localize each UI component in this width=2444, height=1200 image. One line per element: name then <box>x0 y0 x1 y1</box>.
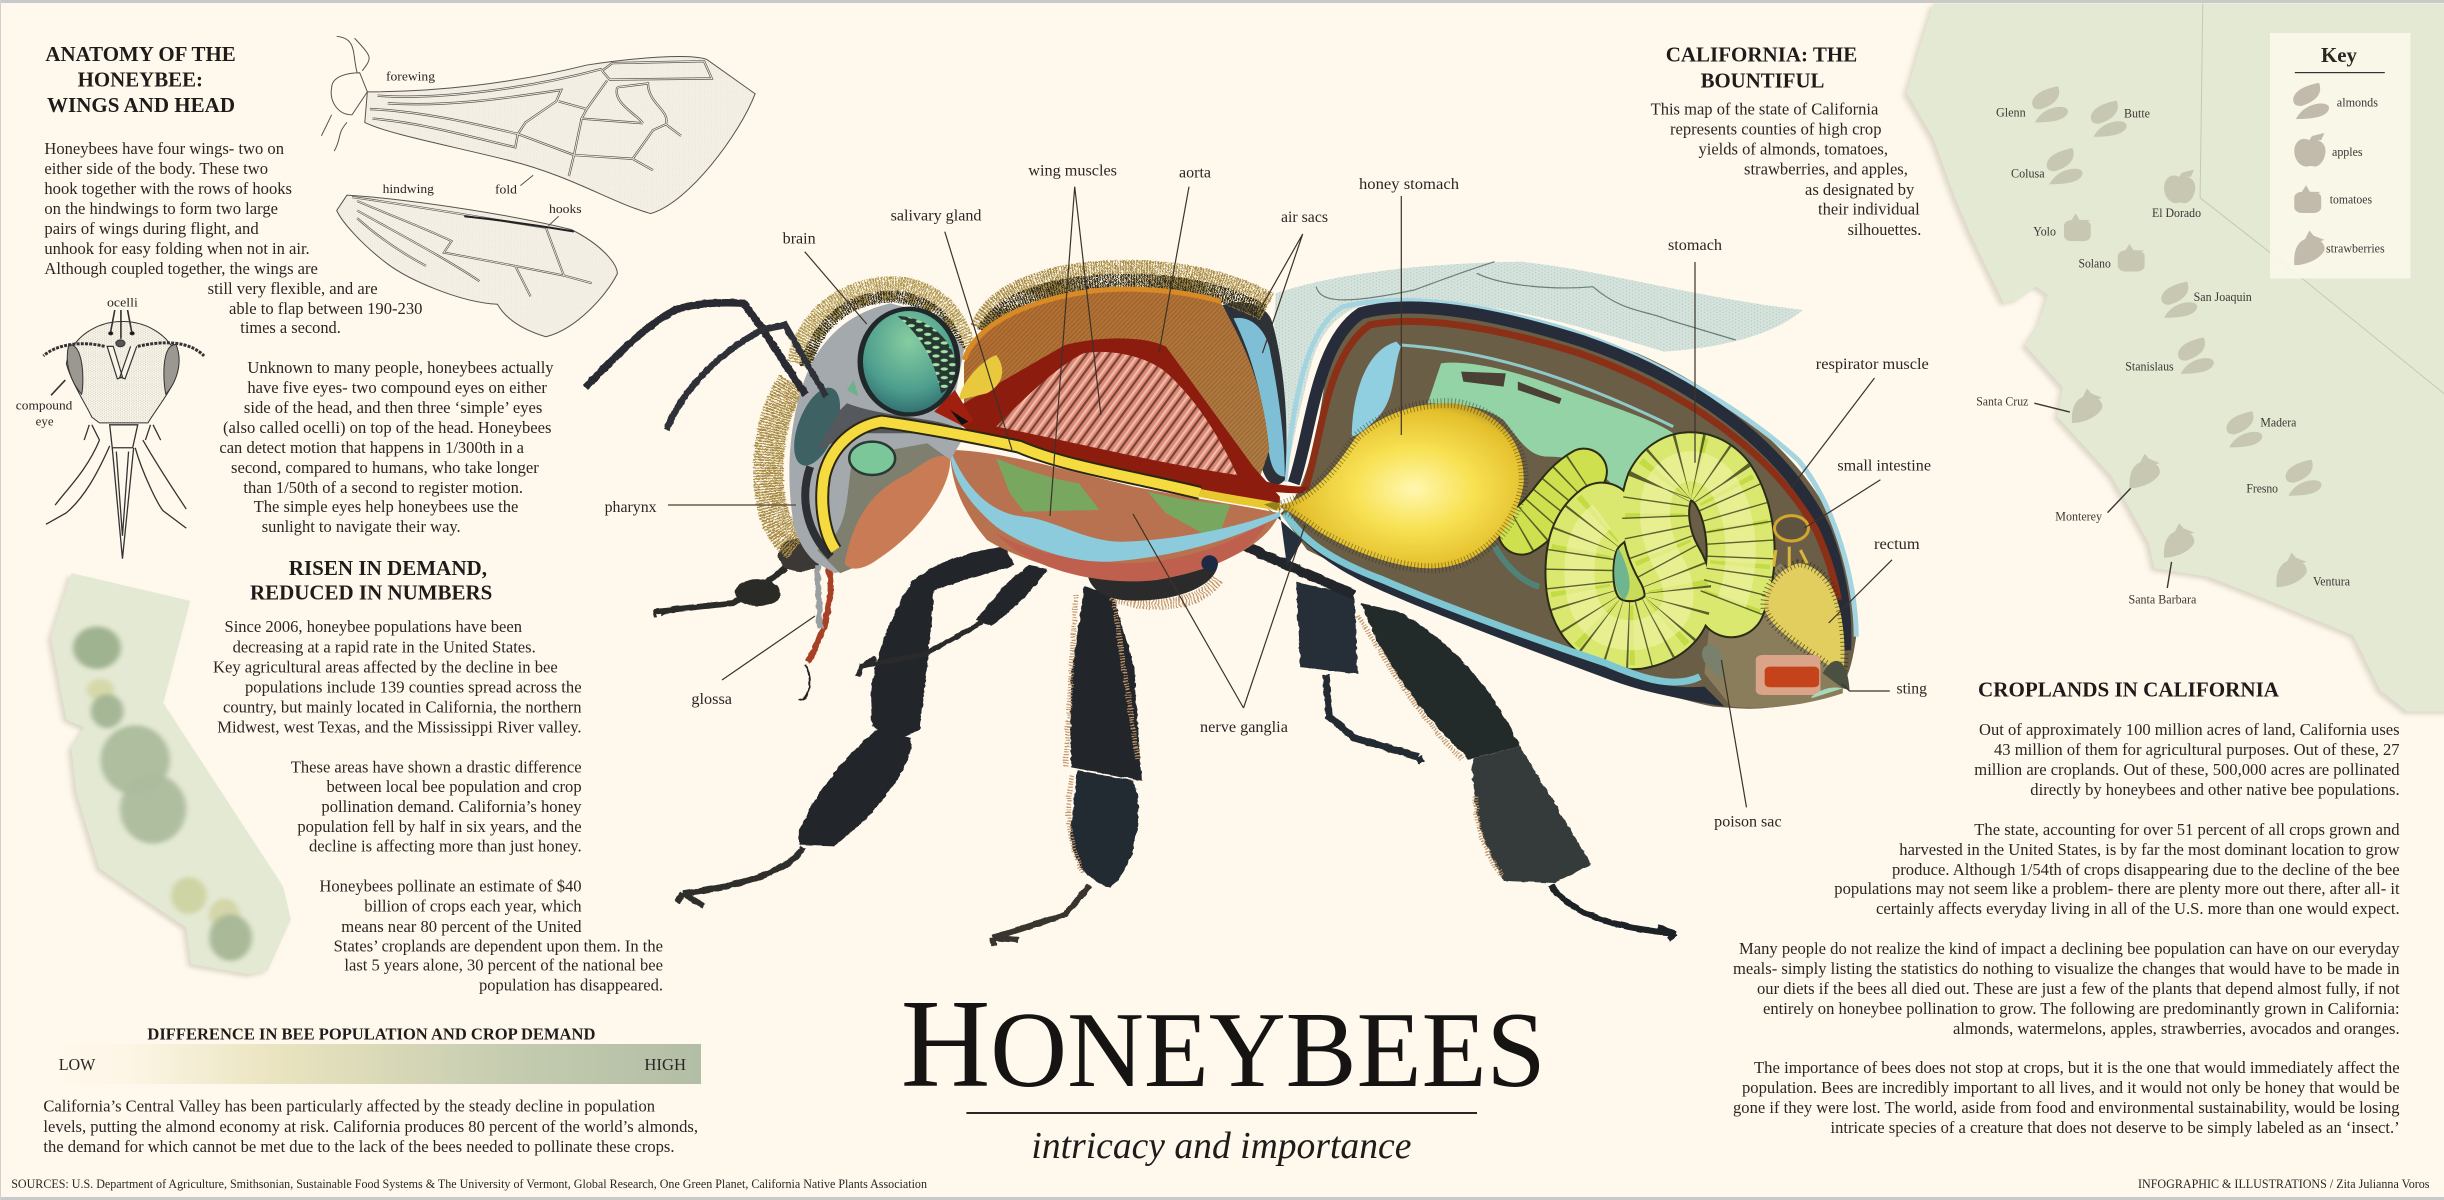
heading: difference: DIFFERENCE IN BEE POPULATION AND CROP DEMAND <box>147 1025 595 1044</box>
text block: croplands: gone if they were lost. The world, aside from food and environmental sustainability, would be losing <box>1733 1098 2400 1117</box>
text block: five eyes: than 1/50th of a second to register motion. <box>243 478 523 497</box>
map labels: counties: Santa Barbara <box>2128 592 2197 606</box>
credit: INFOGRAPHIC & ILLUSTRATIONS / Zita Julianna Voros <box>2138 1177 2430 1191</box>
leader lines <box>668 187 1892 807</box>
title: intricacy and importance <box>1031 1125 1412 1167</box>
text block: risen in demand <box>213 617 663 995</box>
bee labels: sting <box>1896 680 1927 697</box>
heading: croplands: CROPLANDS IN CALIFORNIA <box>1978 678 2279 702</box>
text block: California map intro <box>1651 100 1921 239</box>
text block: Central Valley: levels, putting the almond economy at risk. California produces 80 percent of the world’s almonds, <box>43 1117 698 1136</box>
illustration: head of the bee from the front <box>43 310 204 559</box>
bee abdomen <box>1200 298 1856 709</box>
text block: wings: unhook for easy folding when not in air. <box>44 239 310 258</box>
map labels: counties: Glenn <box>1996 106 2026 120</box>
legend: gradient low to high: LOW <box>59 1055 96 1074</box>
legend: key: apples <box>2332 145 2363 159</box>
title: HONEYBEES <box>901 975 1546 1114</box>
illustration: honeybee cross-section <box>585 262 1856 946</box>
heading: anatomy: ANATOMY OF THE <box>45 42 236 66</box>
map: California crops <box>1907 3 2444 711</box>
legend: gradient low to high <box>46 1044 701 1084</box>
text block: five eyes: can detect motion that happens in 1/300th in a <box>219 438 525 457</box>
map labels: counties: Santa Cruz <box>1976 395 2029 409</box>
text block: California map intro: as designated by <box>1805 180 1915 199</box>
map labels: counties: Madera <box>2260 415 2297 429</box>
text block: five eyes: (also called ocelli) on top of the head. Honeybees <box>223 418 552 437</box>
text block: risen in demand: Since 2006, honeybee populations have been <box>224 617 522 636</box>
text block: California map intro: strawberries, and apples, <box>1744 160 1908 179</box>
text block: wings: pairs of wings during flight, and <box>44 219 259 238</box>
heading: risen in demand <box>250 556 492 605</box>
bee labels: nerve ganglia <box>1200 719 1288 736</box>
bee antennae <box>585 303 826 430</box>
text block: croplands: The importance of bees does not stop at crops, but it is the one that would immediately affect the <box>1754 1058 2400 1077</box>
bee labels: glossa <box>691 691 732 708</box>
text block: risen in demand: These areas have shown a drastic difference <box>291 758 582 777</box>
text block: wings: times a second. <box>240 318 341 337</box>
map labels: counties <box>1976 106 2350 606</box>
bee labels: aorta <box>1179 165 1211 182</box>
text block: croplands: populations may not seem like a problem- there are plenty more out there, after all- it <box>1834 879 2400 898</box>
map labels: counties: Stanislaus <box>2125 359 2174 373</box>
legend: key: tomatoes <box>2330 193 2372 207</box>
bee labels: salivary gland <box>891 208 982 225</box>
text block: risen in demand: Honeybees pollinate an estimate of $40 <box>319 876 582 895</box>
legend: gradient low to high: HIGH <box>644 1055 686 1074</box>
text block: croplands: entirely on honeybee pollination to grow. The following are predominantly grown in California: <box>1763 999 2400 1018</box>
text block: Central Valley: the demand for which cannot be met due to the lack of the bees needed to pollinate these crops. <box>43 1137 674 1156</box>
text block: risen in demand: last 5 years alone, 30 percent of the national bee <box>344 956 663 975</box>
text block: croplands: directly by honeybees and other native bee populations. <box>2030 780 2400 799</box>
bee labels: stomach <box>1668 237 1722 254</box>
text block: wings: on the hindwings to form two large <box>44 199 278 218</box>
text block: wings: hook together with the rows of hooks <box>44 179 292 198</box>
text block: wings: Although coupled together, the wings are <box>44 259 318 278</box>
heading: risen in demand: REDUCED IN NUMBERS <box>250 581 492 605</box>
illustration labels: wings and head <box>16 69 582 429</box>
text block: wings: either side of the body. These two <box>44 159 268 178</box>
text block: California map intro: represents counties of high crop <box>1670 120 1882 139</box>
map labels: counties: Yolo <box>2033 225 2056 239</box>
text block: Central Valley <box>43 1096 698 1156</box>
legend: key: almonds <box>2337 96 2378 110</box>
text block: croplands: 43 million of them for agricultural purposes. Out of these, 27 <box>1994 740 2400 759</box>
illustration labels: wings and head: ocelli <box>107 296 138 310</box>
text block: risen in demand: population has disappeared. <box>479 976 663 995</box>
illustration: forewing and hindwing <box>321 36 755 337</box>
text block: risen in demand: billion of crops each year, which <box>364 896 582 915</box>
text block: risen in demand: decline is affecting more than just honey. <box>309 836 582 855</box>
bee labels <box>605 163 1931 830</box>
map labels: counties: Colusa <box>2011 167 2045 181</box>
bee labels: honey stomach <box>1359 176 1459 193</box>
bee labels: wing muscles <box>1028 163 1117 180</box>
text block: risen in demand: means near 80 percent of the United <box>341 917 582 936</box>
map labels: counties: Monterey <box>2055 510 2103 524</box>
text block: croplands: almonds, watermelons, apples, strawberries, avocados and oranges. <box>1953 1019 2400 1038</box>
text block: croplands: certainly affects everyday living in all of the U.S. more than one would expect. <box>1876 899 2400 918</box>
map labels: counties: El Dorado <box>2152 206 2201 220</box>
map labels: counties: Ventura <box>2313 574 2350 588</box>
text block: croplands: Many people do not realize the kind of impact a declining bee population can have on our everyday <box>1739 939 2400 958</box>
text block: wings <box>44 139 422 337</box>
text block: five eyes: side of the head, and then three ‘simple’ eyes <box>244 398 542 417</box>
text block: risen in demand: between local bee population and crop <box>326 777 582 796</box>
illustration labels: wings and head: hindwing <box>383 182 435 196</box>
text block: five eyes: have five eyes- two compound eyes on either <box>247 378 547 397</box>
text block: five eyes: Unknown to many people, honeybees actually <box>247 358 554 377</box>
text block: risen in demand: Key agricultural areas affected by the decline in bee <box>213 658 558 677</box>
bee legs <box>654 538 1676 946</box>
text block: croplands: meals- simply listing the statistics do nothing to visualize the changes that would have to be made in <box>1733 959 2400 978</box>
heading: California the bountiful: BOUNTIFUL <box>1701 68 1824 92</box>
illustration labels: wings and head: compound <box>16 398 73 412</box>
heading: anatomy <box>45 42 236 117</box>
text block: five eyes: sunlight to navigate their way. <box>262 517 461 536</box>
text block: croplands <box>1733 720 2400 1137</box>
text block: five eyes <box>219 358 554 536</box>
bee forewing <box>1273 262 1803 480</box>
text block: risen in demand: country, but mainly located in California, the northern <box>223 698 582 717</box>
text block: croplands: The state, accounting for over 51 percent of all crops grown and <box>1974 820 2400 839</box>
map labels: counties: Solano <box>2078 257 2111 271</box>
illustration labels: wings and head: hooks <box>549 202 582 216</box>
bee labels: poison sac <box>1714 813 1782 830</box>
text block: five eyes: The simple eyes help honeybees use the <box>254 497 518 516</box>
sources: SOURCES: U.S. Department of Agriculture, Smithsonian, Sustainable Food Systems & The University of Vermont, Global Research, One Green Planet, California Native Plants Association <box>11 1177 928 1191</box>
text block: croplands: million are croplands. Out of these, 500,000 acres are pollinated <box>1974 760 2400 779</box>
text block: risen in demand: States’ croplands are dependent upon them. In the <box>334 936 663 955</box>
text block: California map intro: yields of almonds, tomatoes, <box>1698 140 1888 158</box>
bee labels: small intestine <box>1837 458 1931 474</box>
legend: key <box>2270 33 2410 279</box>
text block: risen in demand: pollination demand. California’s honey <box>321 797 582 816</box>
text block: croplands: produce. Although 1/54th of crops disappearing due to the decline of the bee <box>1892 860 2400 879</box>
bee thorax <box>585 275 1280 601</box>
text block: risen in demand: decreasing at a rapid rate in the United States. <box>233 638 536 657</box>
legend: key: Key <box>2321 43 2357 67</box>
bee head <box>789 303 964 573</box>
heading: anatomy: HONEYBEE: <box>78 68 203 92</box>
icons: crop silhouettes <box>2032 86 2321 587</box>
text block: California map intro: This map of the state of California <box>1651 100 1879 118</box>
text block: wings: Honeybees have four wings- two on <box>44 139 284 158</box>
text block: five eyes: second, compared to humans, who take longer <box>231 458 539 477</box>
bee honey stomach <box>1278 403 1524 568</box>
text block: wings: able to flap between 190-230 <box>229 299 422 318</box>
text block: California map intro: their individual <box>1818 200 1920 219</box>
bee labels: respirator muscle <box>1816 356 1929 373</box>
text block: risen in demand: populations include 139 counties spread across the <box>245 678 582 697</box>
illustration labels: wings and head: eye <box>36 414 54 428</box>
bee labels: air sacs <box>1281 209 1328 226</box>
bee labels: rectum <box>1874 536 1920 553</box>
heading: risen in demand: RISEN IN DEMAND, <box>289 556 487 580</box>
text block: croplands: intricate species of a creature that does not deserve to be simply labeled as an ‘insect.’ <box>1830 1118 2400 1137</box>
text block: croplands: our diets if the bees all died out. These are just a few of the plants that depend almost fully, if not <box>1757 979 2400 998</box>
text block: risen in demand: Midwest, west Texas, and the Mississippi River valley. <box>217 718 582 737</box>
map labels: counties: Butte <box>2124 106 2150 120</box>
heading: California the bountiful: CALIFORNIA: THE <box>1666 42 1857 66</box>
text block: wings: still very flexible, and are <box>208 279 378 298</box>
heading: anatomy: WINGS AND HEAD <box>47 93 235 117</box>
illustration labels: wings and head: forewing <box>386 69 436 83</box>
map: honeybee decline in California <box>51 573 291 974</box>
map labels: counties: San Joaquin <box>2194 290 2253 304</box>
map labels: counties: Fresno <box>2246 481 2278 495</box>
legend: key: strawberries <box>2326 242 2385 256</box>
text block: croplands: Out of approximately 100 million acres of land, California uses <box>1979 720 2400 739</box>
bee labels: pharynx <box>605 499 657 516</box>
illustration labels: wings and head: fold <box>495 183 518 197</box>
text block: Central Valley: California’s Central Valley has been particularly affected by the steady decline in population <box>43 1096 655 1115</box>
text block: croplands: harvested in the United States, is by far the most dominant location to grow <box>1899 840 2400 859</box>
heading: California the bountiful <box>1666 42 1857 92</box>
text block: croplands: population. Bees are incredibly important to all lives, and it would not only be honey that would be <box>1742 1078 2400 1097</box>
bee intestine: ribbed coil <box>1521 466 1741 635</box>
bee labels: brain <box>783 231 816 248</box>
text block: risen in demand: population fell by half in six years, and the <box>297 817 582 836</box>
text block: California map intro: silhouettes. <box>1848 220 1921 239</box>
